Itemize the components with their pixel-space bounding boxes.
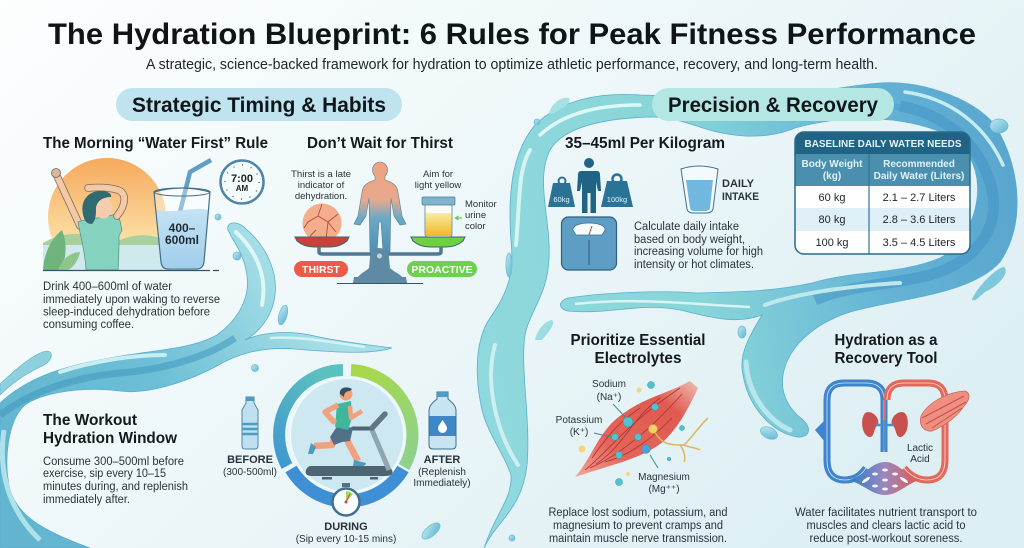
body text xyxy=(43,281,220,331)
heading: Recovery Tool xyxy=(834,350,938,367)
label: after xyxy=(413,392,471,489)
label: sodium: Sodium xyxy=(592,379,626,390)
badge: thirst xyxy=(294,261,348,277)
water stream: lower left xyxy=(0,223,392,548)
label: before: (300-500ml) xyxy=(223,467,277,478)
heading: Hydration as a xyxy=(834,332,938,349)
table: baseline daily water needs: Body Weight xyxy=(802,159,863,170)
icon: clock 7:00 AM xyxy=(220,160,264,204)
badge: thirst: THIRST xyxy=(302,264,341,276)
table: baseline daily water needs: Recommended xyxy=(883,159,955,170)
label: after: Immediately) xyxy=(413,478,471,489)
note: monitor urine color: urine xyxy=(465,210,486,221)
panel: 35-45ml per kilogram xyxy=(548,132,970,271)
icon: urine sample cup xyxy=(422,197,455,237)
note: thirst indicator: dehydration. xyxy=(295,191,347,202)
water droplets xyxy=(215,119,1008,542)
body text: increasing volume for high xyxy=(634,246,763,258)
label: magnesium: (Mg⁺⁺) xyxy=(648,484,680,495)
note: monitor urine color: Monitor xyxy=(465,199,497,210)
heading xyxy=(570,332,706,367)
label: after: (Replenish xyxy=(418,467,466,478)
body text: immediately after. xyxy=(43,494,130,506)
water stream: right loop xyxy=(477,83,1017,548)
table: baseline daily water needs: 2.8 – 3.6 Liters xyxy=(883,214,956,226)
body text: Replace lost sodium, potassium, and xyxy=(548,507,728,519)
table: baseline daily water needs: (kg) xyxy=(823,171,841,182)
table: baseline daily water needs: 60 kg xyxy=(819,192,845,204)
icon: clock 7:00 AM: 7:00 xyxy=(231,173,253,185)
panel: don't wait for thirst xyxy=(291,135,497,284)
label: sodium: (Na⁺) xyxy=(597,392,621,403)
panel: hydration as a recovery tool xyxy=(795,332,977,545)
heading: Don’t Wait for Thirst xyxy=(307,135,454,152)
body text xyxy=(634,221,763,271)
ground line xyxy=(43,270,219,272)
note: aim for light yellow: light yellow xyxy=(415,180,461,191)
heading: Hydration Window xyxy=(43,430,178,447)
label: potassium: (K⁺) xyxy=(570,427,588,438)
label: daily intake xyxy=(722,178,759,203)
title: The Hydration Blueprint: 6 Rules for Peak Fitness Performance xyxy=(48,18,976,51)
icon: person between weights xyxy=(548,158,633,213)
section header: Precision & Recovery xyxy=(652,88,894,121)
heading: The Workout xyxy=(43,412,138,429)
table: baseline daily water needs: BASELINE DAILY WATER NEEDS xyxy=(804,138,962,150)
label: sodium xyxy=(592,379,626,403)
label: during: DURING xyxy=(324,521,368,533)
note: thirst indicator: Thirst is a late xyxy=(291,169,351,180)
table: baseline daily water needs xyxy=(795,132,970,254)
body text: Consume 300–500ml before xyxy=(43,456,184,468)
table: baseline daily water needs: Daily Water (Liters) xyxy=(874,171,964,182)
icon: glass with straw xyxy=(154,160,211,269)
subtitle: A strategic, science-backed framework for hydration to optimize athletic performance, recovery, and long-term health. xyxy=(146,57,878,73)
body text: reduce post-workout soreness. xyxy=(810,533,962,545)
label: daily intake: INTAKE xyxy=(722,191,759,203)
panel: essential electrolytes xyxy=(548,332,728,545)
table: baseline daily water needs: 2.1 – 2.7 Liters xyxy=(883,192,956,204)
label: lactic acid: Lactic xyxy=(907,443,933,454)
label: before xyxy=(223,397,277,478)
body text: immediately upon waking to reverse xyxy=(43,294,220,306)
label: during: (Sip every 10-15 mins) xyxy=(296,534,396,545)
illustration: muscle fibre with ions xyxy=(575,381,708,486)
body text: Water facilitates nutrient transport to xyxy=(795,507,977,519)
heading xyxy=(43,412,178,447)
label: during xyxy=(296,521,396,545)
body text: muscles and clears lactic acid to xyxy=(806,520,966,532)
body text: consuming coffee. xyxy=(43,319,134,331)
badge: proactive xyxy=(407,261,477,277)
icon: clock 7:00 AM: AM xyxy=(236,184,249,193)
icon: glass with straw: 600ml xyxy=(165,233,199,247)
body text xyxy=(43,456,188,506)
badge: proactive: PROACTIVE xyxy=(411,264,473,276)
body text: based on body weight, xyxy=(634,234,745,246)
note: monitor urine color: color xyxy=(465,221,486,232)
chart: hydration timing ring xyxy=(279,370,412,501)
body text: intensity or hot climates. xyxy=(634,259,754,271)
body text: Calculate daily intake xyxy=(634,221,739,233)
icon: human figure xyxy=(354,162,406,252)
table: baseline daily water needs: 80 kg xyxy=(819,214,845,226)
table: baseline daily water needs: 100 kg xyxy=(815,237,849,249)
note: monitor urine color xyxy=(456,199,497,232)
icon: glass of water xyxy=(681,166,718,213)
icon: stopwatch xyxy=(332,483,360,516)
body text: minutes during, and replenish xyxy=(43,481,188,493)
icon: muscle xyxy=(920,391,969,431)
heading: The Morning “Water First” Rule xyxy=(43,135,268,152)
icon: kidneys xyxy=(862,412,908,450)
icon: glass with straw: 400– xyxy=(169,221,196,235)
heading: 35–45ml Per Kilogram xyxy=(565,135,725,152)
icon: person between weights: 100kg xyxy=(607,195,627,204)
label: potassium: Potassium xyxy=(556,415,602,426)
icon: person between weights: 60kg xyxy=(553,195,570,204)
label: magnesium: Magnesium xyxy=(638,472,690,483)
body text: maintain muscle nerve transmission. xyxy=(549,533,727,545)
label: after: AFTER xyxy=(424,454,460,466)
body text xyxy=(795,507,977,545)
label: daily intake: DAILY xyxy=(722,178,755,190)
icon: runner on treadmill xyxy=(306,387,392,480)
label: magnesium xyxy=(638,472,690,495)
label: before: BEFORE xyxy=(227,454,273,466)
illustration: sunrise and woman stretching xyxy=(43,158,170,276)
body text: exercise, sip every 10–15 xyxy=(43,468,166,480)
diagram: circulation loop xyxy=(815,383,945,495)
section header: Precision & Recovery: Precision & Recovery xyxy=(668,94,878,117)
heading: Electrolytes xyxy=(594,350,682,367)
heading xyxy=(834,332,938,367)
table: baseline daily water needs: 3.5 – 4.5 Liters xyxy=(883,237,956,249)
body text: magnesium to prevent cramps and xyxy=(553,520,723,532)
section header: Strategic Timing & Habits: Strategic Timing & Habits xyxy=(132,94,386,117)
label: potassium xyxy=(556,415,602,438)
note: thirst indicator xyxy=(291,169,351,202)
icon: cracked dry ball xyxy=(302,204,342,242)
label: lactic acid: Acid xyxy=(910,454,930,465)
label: lactic acid xyxy=(907,443,933,465)
note: thirst indicator: indicator of xyxy=(298,180,345,191)
body text xyxy=(548,507,728,545)
icon: bathroom scale xyxy=(562,217,616,270)
icon: balance scale xyxy=(295,237,465,284)
heading: Prioritize Essential xyxy=(570,332,706,349)
note: aim for light yellow xyxy=(415,169,461,191)
body text: sleep-induced dehydration before xyxy=(43,306,210,318)
section header: Strategic Timing & Habits xyxy=(116,88,402,121)
note: aim for light yellow: Aim for xyxy=(423,169,453,180)
body text: Drink 400–600ml of water xyxy=(43,281,172,293)
panel: workout hydration window xyxy=(43,370,471,545)
panel: morning water first rule xyxy=(43,135,268,331)
